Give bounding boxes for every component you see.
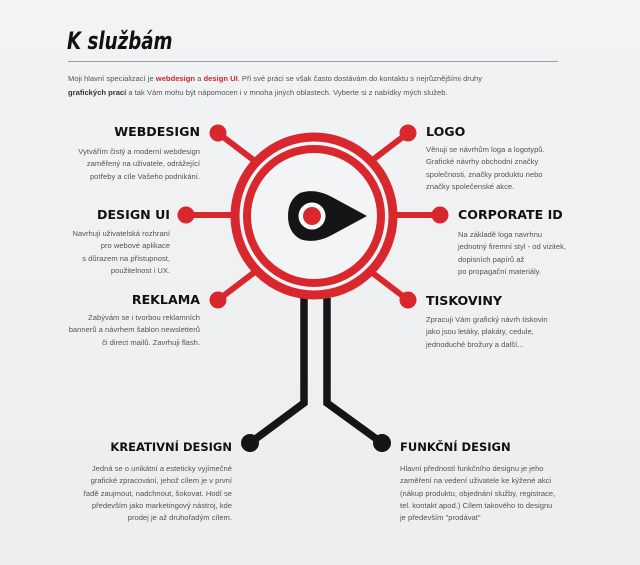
title: K službám (67, 27, 173, 55)
panel: webdesign: zaměřený na uživatele, odrážející (87, 159, 200, 168)
panel: design ui: použitelnost i UX. (111, 266, 170, 275)
panel: design ui (72, 207, 170, 275)
intro text: grafických prací a tak Vám mohu být nápomocen i v mnoha jiných oblastech. Vyberte si z nabídky mých služeb. (68, 88, 448, 97)
panel: funkcni design: FUNKČNÍ DESIGN (400, 440, 511, 454)
panel: kreativni design: KREATIVNÍ DESIGN (110, 440, 232, 454)
panel: corporate id: po propagační materiály. (458, 267, 541, 276)
panel: funkcni design: tel. kontakt apod.) Cílem takového to designu (400, 501, 552, 510)
panel: funkcni design: zaměření na vedení uživatele ke kýžené akci (400, 476, 551, 485)
panel: corporate id: jednotný firemní styl - od vizitek, (458, 242, 566, 251)
panel: tiskoviny: jako jsou letáky, plakáty, cedule, (426, 327, 534, 336)
panel: corporate id (458, 207, 566, 276)
panel: design ui: DESIGN UI (97, 207, 170, 222)
panel: reklama (69, 292, 200, 347)
panel: kreativni design: Jedná se o unikátní a esteticky vyjímečné (92, 464, 232, 473)
black legs (250, 298, 382, 443)
panel: kreativni design: především jako marketingový nástroj, kde (92, 501, 232, 510)
panel: kreativni design: řadě zaujmout, nadchnout, šokovat. Hodí se (83, 489, 232, 498)
panel: logo: Grafické návrhy obchodní značky (426, 157, 538, 166)
panel: reklama: či direct mailů. Zavrhuji flash. (102, 338, 200, 347)
panel: funkcni design (400, 440, 555, 522)
panel: logo: LOGO (426, 124, 465, 139)
panel: design ui: pro webové aplikace (101, 241, 170, 250)
panel: reklama: Zabývám se i tvorbou reklamních (88, 313, 200, 322)
panel: reklama: REKLAMA (132, 292, 200, 307)
panel: funkcni design: Hlavní předností funkčního designu je jeho (400, 464, 544, 473)
panel: logo (426, 124, 545, 191)
panel: kreativni design (83, 440, 232, 522)
panel: corporate id: CORPORATE ID (458, 207, 563, 222)
panel: logo: společnosti, značky produktu nebo (426, 170, 543, 179)
panel: tiskoviny (426, 293, 548, 349)
panel: logo: značky společenské akce. (426, 182, 514, 191)
red spokes (178, 124, 448, 308)
panel: design ui: Navrhuji uživatelská rozhraní (72, 229, 170, 238)
panel: webdesign: WEBDESIGN (114, 124, 200, 139)
rings (235, 137, 393, 295)
panel: design ui: s důrazem na přístupnost, (82, 254, 170, 263)
panel: corporate id: Na základě loga navrhnu (458, 230, 542, 239)
icon: pin (288, 191, 367, 241)
panel: reklama: bannerů a návrhem šablon newsletterů (69, 325, 200, 334)
panel: tiskoviny: Zpracuji Vám grafický návrh tiskovin (426, 315, 548, 324)
panel: funkcni design: (nákup produktu, objednání služby, registrace, (400, 489, 555, 498)
panel: tiskoviny: jednoduché brožury a další... (426, 340, 524, 349)
intro text (68, 74, 482, 97)
panel: funkcni design: je především "prodávat" (400, 513, 481, 522)
panel: logo: Věnuji se návrhům loga a logotypů. (426, 145, 545, 154)
panel: tiskoviny: TISKOVINY (426, 293, 502, 308)
panel: kreativni design: prodej je až druhořadým cílem. (128, 513, 232, 522)
intro text: Moji hlavní specializací je webdesign a design UI. Při své práci se však často dostávám do kontaktu s nejrůznějšími druhy (68, 74, 482, 83)
panel: webdesign: potřeby a cíle Vašeho podnikání. (90, 172, 200, 181)
panel: kreativni design: grafické zpracování, jehož cílem je v první (91, 476, 232, 485)
panel: corporate id: dopisních papírů až (458, 255, 524, 264)
panel: webdesign (78, 124, 200, 181)
panel: webdesign: Vytvářím čistý a moderní webdesign (78, 147, 200, 156)
